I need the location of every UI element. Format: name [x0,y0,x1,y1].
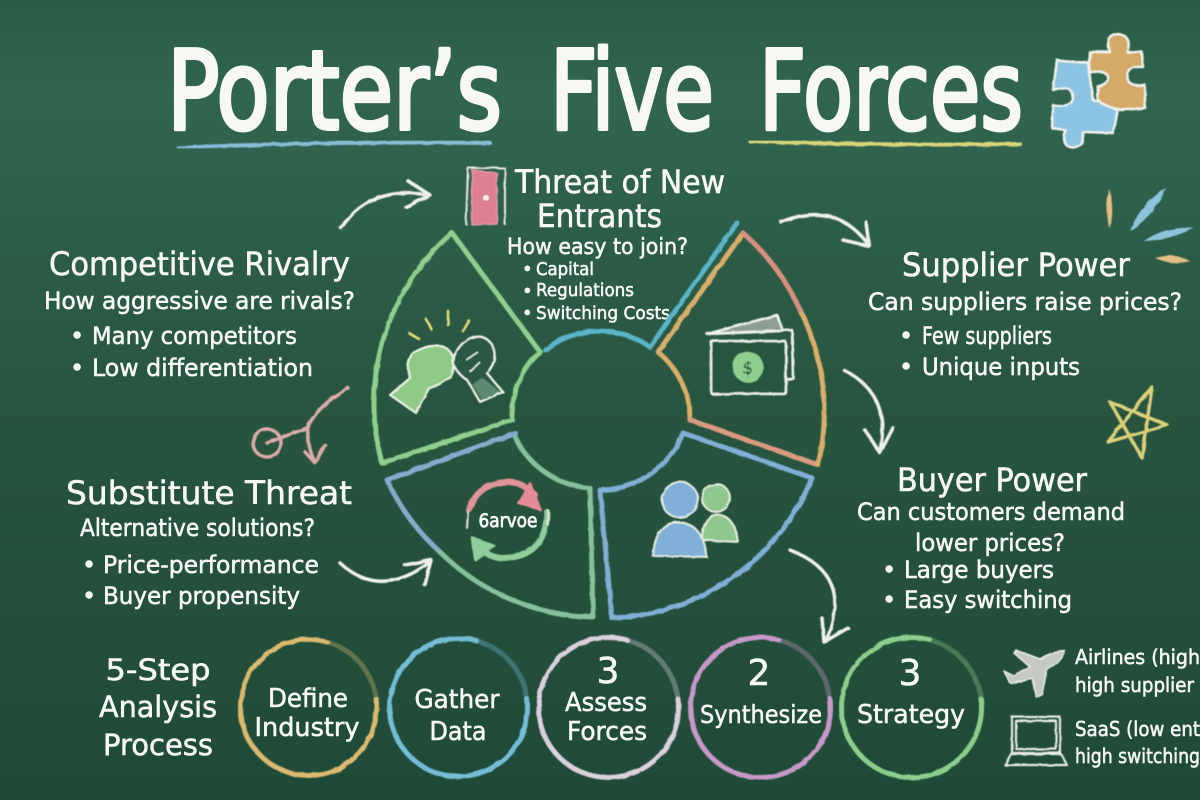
step: assess forces: Forces [567,717,647,747]
arrow: substitute to wheel [340,560,431,585]
bullets [82,551,319,610]
bullets: Regulations [536,280,634,301]
icon: pink target arrow [253,388,348,463]
title: Porter’s [167,27,502,155]
bullets: • [522,303,533,324]
icon: airplane [1004,650,1065,697]
step: gather data: Data [430,717,486,747]
step: gather data: Gather [414,685,500,715]
segment: supplier power [658,233,824,465]
bullets: Buyer propensity [103,582,300,610]
arrow: buyer to steps [790,550,848,642]
bullets: • [70,354,84,382]
question: How aggressive are rivals? [44,287,355,315]
text: saas example [1075,717,1200,768]
icon: star [1108,387,1167,458]
text: airlines example [1075,645,1200,697]
panel: competitive rivalry [44,245,355,382]
bullets: Price-performance [103,551,319,579]
panel: substitute threat [66,474,352,610]
step circles [241,638,982,778]
step: synthesize [691,638,831,778]
step: define industry [241,639,377,775]
bullets [899,322,1080,381]
question: Alternative solutions? [80,514,315,542]
icon: laptop [1005,717,1067,765]
icon: door [466,168,505,225]
title: Forces [759,27,1023,155]
bullets: • [882,556,896,584]
arrow: new entrants to supplier [781,215,869,246]
bullets [882,556,1072,614]
step: define industry: Industry [254,713,360,743]
bullets: • [82,582,96,610]
segment: competitive rivalry [374,233,540,463]
icon: chalk strokes [1106,188,1194,263]
bullets: • [899,322,913,350]
step: synthesize: Synthesize [700,700,822,729]
icon: money: $ [742,358,754,379]
panel: buyer power: lower prices? [915,529,1065,557]
bullets: Unique inputs [922,353,1080,381]
panel: supplier power [868,246,1182,381]
bullets: • [70,322,84,350]
step: assess forces: 3 [597,651,619,692]
bullets: • [522,259,533,280]
heading: Competitive Rivalry [49,245,350,283]
icon: service cycle [467,482,548,560]
bullets: Switching Costs [536,303,670,324]
heading: Substitute Threat [66,474,352,512]
bullets: Many competitors [92,322,297,350]
bullets: Capital [536,259,594,280]
panel: threat of new entrants: Entrants [537,197,662,235]
segment: substitute threat [387,433,593,617]
heading: 5-step analysis process: Analysis [99,690,217,724]
segment: buyer power [600,433,812,618]
step: assess forces [539,638,679,778]
step: synthesize: 2 [748,653,770,694]
bullets: • [899,353,913,381]
step: strategy: 3 [899,653,921,694]
arrow: supplier to buyer [844,370,893,453]
title underlines [178,141,1020,148]
icon: money [706,315,793,394]
bullets [70,322,313,382]
arrow: rivalry to new entrants [341,181,430,228]
question: Can customers demand [857,498,1125,526]
bullets: Easy switching [904,586,1072,614]
bullets: • [82,551,96,579]
bullets [522,259,670,324]
heading: Buyer Power [897,461,1088,499]
step: strategy [842,638,982,778]
bullets: Few suppliers [922,322,1052,350]
service label: 6arvoe [478,510,538,532]
step: gather data [390,638,528,776]
step: strategy: Strategy [857,700,965,730]
title [167,27,1023,155]
panel: buyer power [857,461,1125,614]
bullets: • [882,586,896,614]
question: How easy to join? [507,235,688,260]
segment: threat of new entrants arc [545,223,737,350]
step: assess forces: Assess [565,688,647,718]
heading: Threat of New [514,163,725,201]
arrows [340,181,893,642]
bullets: Low differentiation [92,354,313,382]
wheel diagram [374,223,824,618]
bullets: • [522,281,533,302]
heading: 5-step analysis process: Process [103,728,213,762]
question: Can suppliers raise prices? [868,288,1182,316]
icon: puzzle pieces [1052,34,1145,148]
icon: fist bump [390,311,503,413]
heading: 5-step analysis process [99,653,217,762]
step: define industry: Define [268,684,348,714]
panel: threat of new entrants [466,163,725,324]
title: Five [550,27,714,155]
heading: Supplier Power [902,246,1131,284]
heading: 5-step analysis process: 5-Step [106,653,210,687]
bullets: Large buyers [904,556,1054,584]
icon: people [653,482,738,557]
